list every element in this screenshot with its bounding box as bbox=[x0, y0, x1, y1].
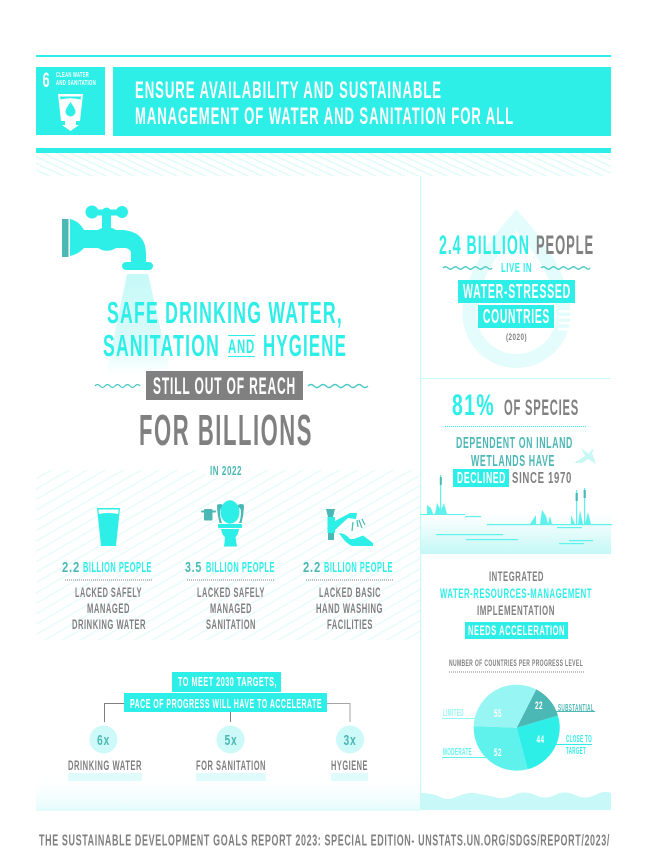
icon: water drop watermark bbox=[470, 220, 572, 361]
pie label: close to target: TARGET bbox=[566, 746, 586, 757]
target: drinking water: DRINKING WATER bbox=[68, 758, 142, 773]
icon: water beam bbox=[106, 274, 171, 375]
target: hygiene: HYGIENE bbox=[331, 758, 368, 773]
stat: sanitation bbox=[185, 559, 275, 632]
panel: water resources management: INTEGRATED bbox=[489, 569, 544, 584]
panel: water stress: 2.4 BILLION bbox=[439, 230, 530, 260]
stat: drinking water: MANAGED bbox=[87, 601, 130, 616]
stat: hand washing bbox=[303, 559, 393, 632]
still out of reach label: STILL OUT OF REACH bbox=[153, 373, 296, 400]
for billions heading: FOR BILLIONS bbox=[139, 406, 313, 455]
wave dividers bbox=[95, 384, 368, 388]
bottom wave bbox=[421, 792, 611, 810]
top rule bbox=[36, 55, 611, 57]
stat: drinking water: 2.2 bbox=[62, 559, 80, 576]
stat: drinking water: DRINKING WATER bbox=[72, 617, 146, 632]
still out of reach label bbox=[146, 371, 303, 400]
pie chart bbox=[474, 685, 560, 771]
panel: species: OF SPECIES bbox=[504, 395, 579, 420]
stat: drinking water: LACKED SAFELY bbox=[75, 585, 142, 600]
wetland scene bbox=[420, 475, 612, 554]
panel: species: WETLANDS HAVE bbox=[471, 453, 555, 470]
panel: water stress: LIVE IN bbox=[501, 260, 532, 275]
stat: hand washing: FACILITIES bbox=[327, 617, 373, 632]
panel: water resources management: IMPLEMENTATION bbox=[477, 603, 555, 618]
panel: species: SINCE 1970 bbox=[512, 470, 572, 487]
pie chart: 22 bbox=[535, 700, 543, 712]
stat: hand washing: HAND WASHING bbox=[316, 601, 383, 616]
panel: water stress bbox=[439, 230, 594, 342]
icon: bird bbox=[574, 448, 596, 464]
stat: sanitation: MANAGED bbox=[210, 601, 252, 616]
target: drinking water bbox=[68, 726, 142, 781]
icon: toilet bbox=[201, 500, 244, 546]
target: drinking water: 6x bbox=[97, 732, 110, 749]
panel: species: DECLINED bbox=[457, 470, 506, 487]
main heading bbox=[103, 295, 347, 363]
panel: water resources management bbox=[440, 569, 592, 639]
text: CLOSE TO bbox=[566, 734, 592, 745]
main heading: HYGIENE bbox=[263, 328, 347, 363]
icon: hand washing bbox=[326, 509, 373, 546]
stat: drinking water bbox=[62, 559, 152, 632]
target: hygiene: 3x bbox=[344, 732, 356, 749]
panel: water stress: (2020) bbox=[506, 332, 527, 342]
stat: hand washing: LACKED BASIC bbox=[319, 585, 381, 600]
header band bbox=[36, 148, 611, 153]
column divider lines bbox=[420, 176, 611, 810]
main heading: SAFE DRINKING WATER, bbox=[107, 295, 343, 330]
text: BILLION PEOPLE bbox=[324, 559, 393, 576]
pie label: limited: LIMITED bbox=[443, 708, 464, 719]
icon: faucet bbox=[62, 206, 153, 270]
goal 6 badge: AND SANITATION bbox=[56, 80, 96, 87]
panel: species bbox=[445, 389, 587, 487]
icon: glass bbox=[97, 508, 120, 546]
stat: hand washing: 2.2 bbox=[303, 559, 321, 576]
pie label: close to target bbox=[536, 734, 592, 757]
goal 6 badge: CLEAN WATER bbox=[56, 72, 89, 79]
pie label: substantial bbox=[535, 703, 595, 714]
year label bbox=[205, 463, 248, 478]
text: BILLION PEOPLE bbox=[83, 559, 152, 576]
panel: water stress: COUNTRIES bbox=[483, 306, 550, 328]
year label: IN 2022 bbox=[210, 463, 242, 478]
pie chart: 44 bbox=[536, 734, 545, 746]
stat: sanitation: LACKED SAFELY bbox=[197, 585, 265, 600]
panel: water resources management: NEEDS ACCELERATION bbox=[468, 623, 565, 638]
text: BILLION PEOPLE bbox=[206, 559, 275, 576]
target: sanitation: 5x bbox=[224, 732, 238, 749]
targets callout: PACE OF PROGRESS WILL HAVE TO ACCELERATE bbox=[130, 696, 322, 711]
main heading: SANITATION bbox=[103, 328, 220, 363]
target: sanitation bbox=[196, 726, 266, 781]
lower left hatched background bbox=[36, 470, 420, 811]
main heading: AND bbox=[228, 337, 255, 358]
goal 6 badge bbox=[36, 67, 105, 135]
title banner bbox=[113, 67, 611, 136]
goal 6 badge: 6 bbox=[42, 69, 50, 92]
target: hygiene bbox=[331, 726, 368, 781]
pie chart: 52 bbox=[494, 747, 502, 759]
connector lines bbox=[104, 704, 350, 722]
pie chart: 55 bbox=[494, 708, 502, 720]
stat: sanitation: SANITATION bbox=[206, 617, 256, 632]
pie label: moderate: MODERATE bbox=[443, 747, 472, 758]
targets callout: TO MEET 2030 TARGETS, bbox=[178, 674, 277, 689]
targets callout bbox=[124, 672, 327, 712]
chart title bbox=[449, 658, 584, 672]
target: sanitation: FOR SANITATION bbox=[196, 758, 266, 773]
panel: species: 81% bbox=[452, 389, 495, 422]
text: SUBSTANTIAL bbox=[558, 703, 594, 714]
stat: sanitation: 3.5 bbox=[185, 559, 202, 576]
